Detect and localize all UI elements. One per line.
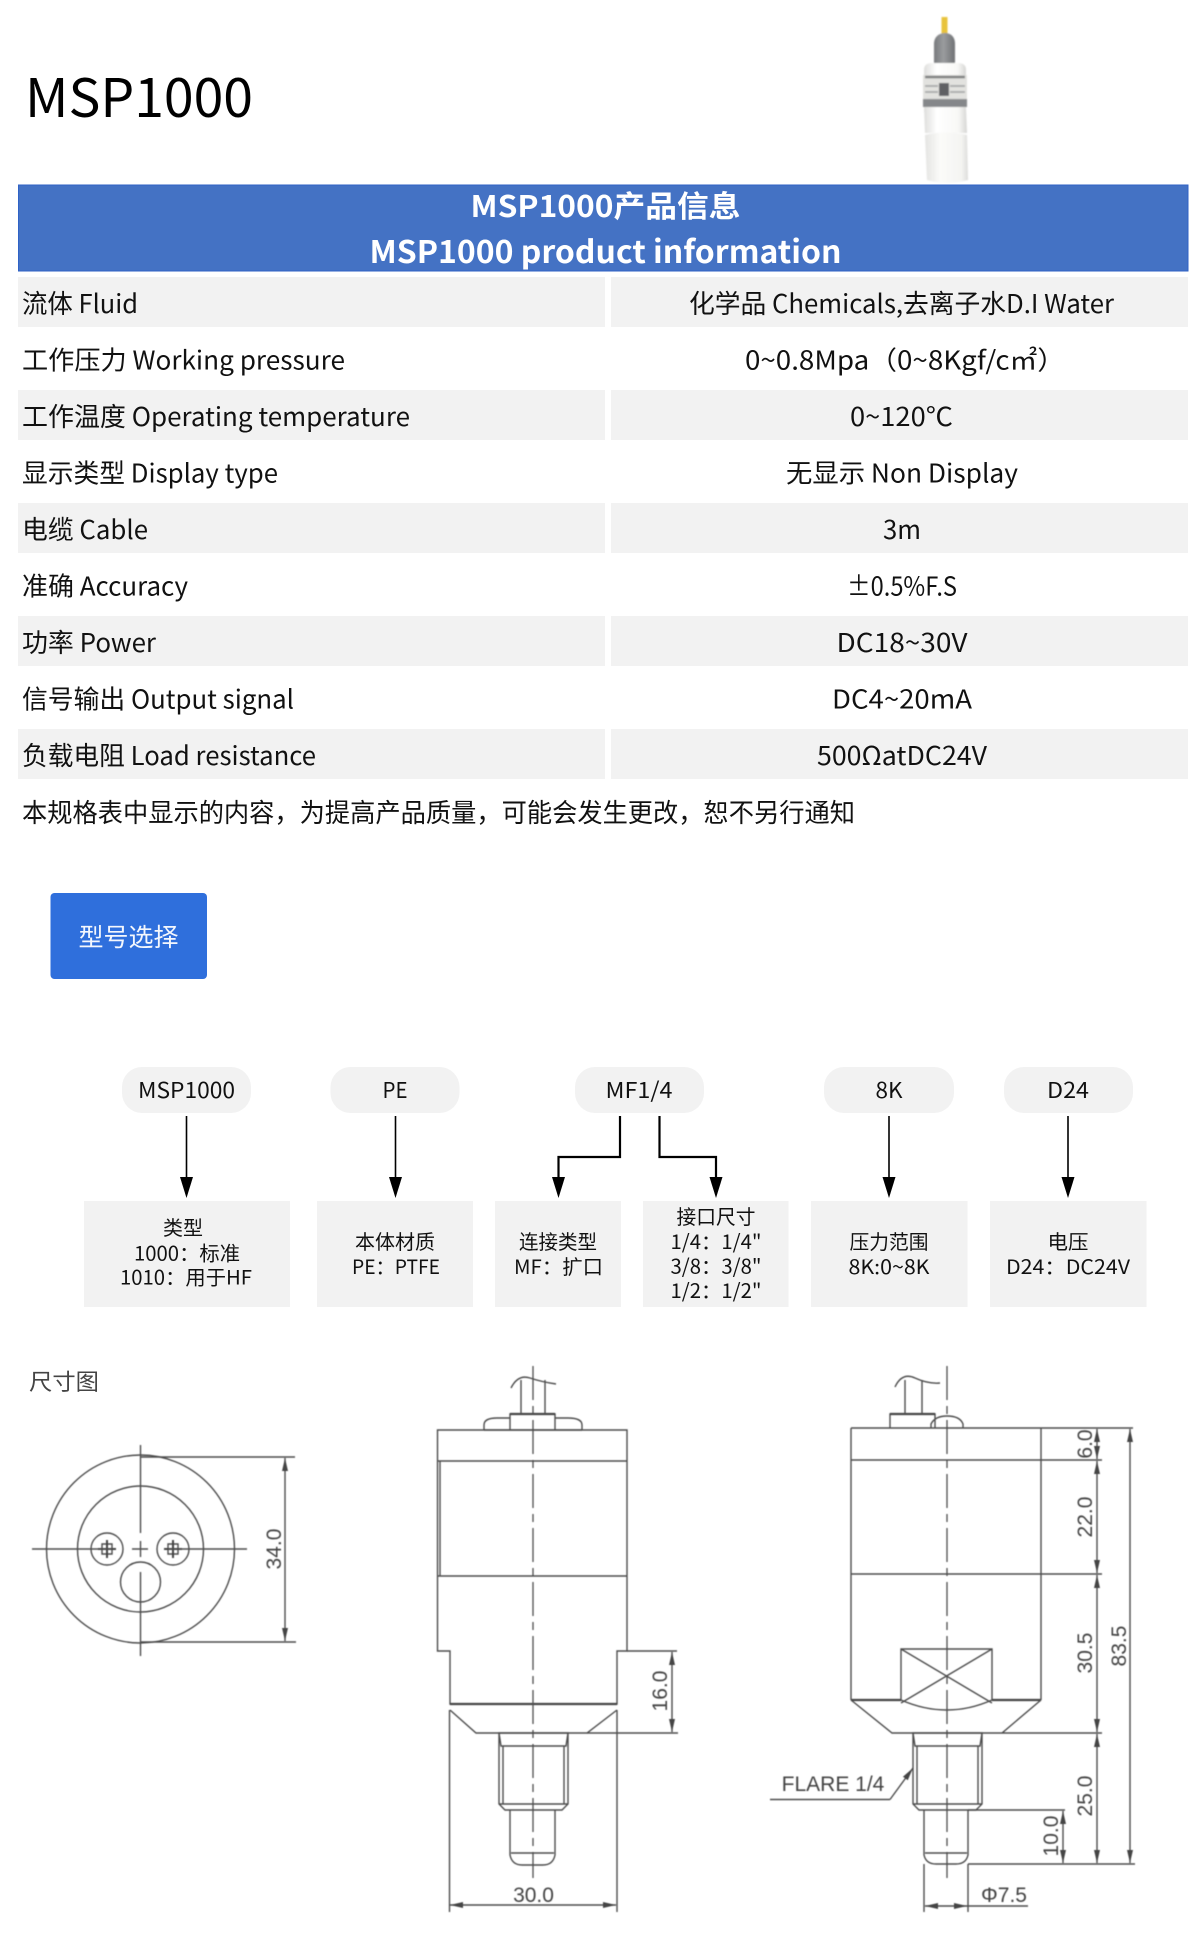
table: row working pressure (22, 340, 1065, 378)
table: row load resistance (18, 729, 1188, 779)
drawing: side view: FLARE 1/4 (782, 1773, 885, 1796)
table: row power: DC18~30V (836, 623, 968, 660)
table: row operating temperature: 工作温度 Operating temperature (22, 397, 410, 434)
option box: voltage (990, 1201, 1146, 1307)
code pill: 8K: 8K (876, 1073, 903, 1105)
table: row cable (18, 503, 1188, 553)
drawing: side view: 30.5 (1074, 1633, 1097, 1673)
table note: 本规格表中显示的内容，为提高产品质量，可能会发生更改，恕不另行通知 (22, 793, 855, 830)
option box: pressure range: 压力范围 (850, 1226, 928, 1255)
drawing: top view (32, 1445, 296, 1656)
option box: connection type (495, 1201, 621, 1307)
arrow: 8K to pressure range (882, 1116, 896, 1198)
option box: port size: 1/2：1/2" (670, 1275, 762, 1304)
option box: body material (317, 1201, 473, 1307)
table: row load resistance: 负载电阻 Load resistance (22, 736, 316, 773)
arrow: MSP1000 to type (180, 1116, 193, 1198)
table: row operating temperature (18, 390, 1188, 440)
option box: type: 类型 (163, 1212, 203, 1241)
drawing: side view: 22.0 (1074, 1497, 1097, 1537)
code pill: PE: PE (382, 1073, 408, 1105)
button: model selection: 型号选择 (78, 918, 178, 954)
table: row power: 功率 Power (22, 623, 157, 660)
arrow: MF1/4 to connection type (552, 1116, 620, 1198)
drawing: front view (438, 1366, 678, 1912)
drawing: front view: 16.0 (649, 1671, 672, 1711)
table header: MSP1000 product information (370, 227, 842, 272)
table: row display type: 显示类型 Display type (22, 454, 278, 490)
heading: dimension drawing: 尺寸图 (29, 1365, 99, 1397)
table: row operating temperature: 0~120℃ (850, 397, 953, 434)
option box: type: 1000：标准 (134, 1238, 240, 1266)
option box: port size (643, 1201, 788, 1307)
drawing: side view (770, 1366, 1135, 1912)
table: row power (18, 616, 1188, 666)
table: row output signal: 信号输出 Output signal (22, 680, 294, 716)
drawing: front view: 30.0 (513, 1884, 554, 1907)
table: row load resistance: 500ΩatDC24V (817, 736, 987, 773)
option box: port size: 1/4：1/4" (670, 1226, 762, 1255)
table: row cable: 3m (883, 510, 921, 547)
table header (18, 182, 1188, 272)
drawing: side view: Φ7.5 (981, 1884, 1027, 1907)
table: row display type (22, 454, 1018, 490)
table: row accuracy (22, 566, 957, 604)
drawing: side view: 83.5 (1108, 1626, 1131, 1666)
code pill: PE (330, 1067, 460, 1113)
option box: connection type: 连接类型 (519, 1226, 597, 1255)
option box: pressure range (811, 1201, 968, 1307)
table: row fluid: 流体 Fluid (22, 284, 138, 321)
button: model selection (50, 893, 207, 979)
arrow: D24 to voltage (1062, 1116, 1074, 1198)
drawing: side view: 25.0 (1074, 1776, 1097, 1816)
table: row accuracy: ±0.5%F.S (847, 566, 957, 604)
code pill: 8K (824, 1067, 954, 1113)
title: MSP1000 (25, 57, 253, 133)
option box: port size: 接口尺寸 (676, 1201, 756, 1230)
code pill: D24: D24 (1047, 1073, 1089, 1105)
option box: type (84, 1201, 290, 1307)
product photo (923, 17, 968, 183)
drawing: top view: 34.0 (263, 1529, 286, 1569)
option box: pressure range: 8K:0~8K (848, 1251, 930, 1280)
option box: body material: 本体材质 (355, 1226, 435, 1255)
table: row working pressure: 0~0.8Mpa（0~8Kgf/c㎡） (745, 340, 1065, 378)
table: row cable: 电缆 Cable (22, 510, 148, 547)
drawing: side view: 6.0 (1074, 1429, 1097, 1459)
code pill: MF1/4: MF1/4 (606, 1073, 672, 1105)
option box: type: 1010：用于HF (120, 1262, 252, 1290)
arrow: MF1/4 to port size (660, 1116, 722, 1198)
code pill: D24 (1004, 1067, 1133, 1113)
code pill: MSP1000 (122, 1067, 251, 1113)
table: row output signal (22, 680, 972, 716)
code pill: MSP1000: MSP1000 (138, 1073, 235, 1105)
code pill: MF1/4 (575, 1067, 704, 1113)
table: row working pressure: 工作压力 Working pressure (22, 340, 345, 378)
table: row display type: 无显示 Non Display (786, 454, 1018, 490)
table: row fluid (18, 277, 1188, 327)
option box: body material: PE：PTFE (352, 1251, 440, 1280)
table: row output signal: DC4~20mA (832, 680, 972, 716)
table: row fluid: 化学品 Chemicals,去离子水D.I Water (689, 284, 1115, 321)
option box: voltage: 电压 (1048, 1226, 1088, 1255)
table header: MSP1000产品信息 (470, 182, 740, 226)
option box: connection type: MF：扩口 (514, 1251, 603, 1280)
drawing: side view: 10.0 (1040, 1816, 1063, 1856)
arrow: PE to body material (389, 1116, 402, 1198)
option box: voltage: D24：DC24V (1006, 1251, 1131, 1280)
option box: port size: 3/8：3/8" (670, 1250, 762, 1280)
table: row accuracy: 准确 Accuracy (22, 566, 188, 604)
